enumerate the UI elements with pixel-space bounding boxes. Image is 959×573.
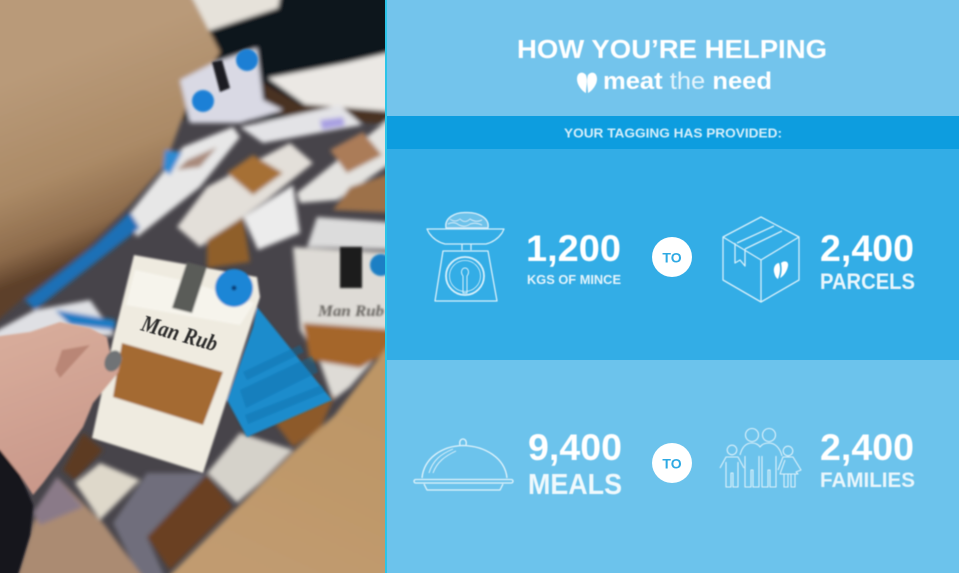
logo: meat the need: meat the need (603, 68, 772, 95)
second pouch label: Man Rub: Man Rub (317, 303, 384, 320)
stat: 2,400 parcels (820, 228, 915, 294)
panel: bottom statistics background (387, 360, 959, 573)
stat: 2,400 families: FAMILIES (820, 469, 915, 492)
badge: to (652, 443, 692, 483)
bottom left box (18, 482, 143, 573)
stat: 9,400 meals: MEALS (528, 469, 622, 501)
icon: scales with mince (427, 212, 504, 301)
right pouch (293, 247, 400, 400)
badge: to (652, 237, 692, 277)
stat: 1,200 kgs of mince (526, 228, 621, 287)
stat: 1,200 kgs of mince: 1,200 (526, 228, 621, 269)
pouch label: Man Rub: Man Rub (138, 311, 220, 356)
main pouch (92, 255, 260, 473)
stat: 9,400 meals (528, 427, 622, 501)
stat: 1,200 kgs of mince: KGS OF MINCE (527, 272, 621, 287)
panel: header background (387, 0, 959, 116)
divider strip (385, 0, 387, 573)
panel: photo of spice pouches in a cardboard box (0, 0, 420, 573)
badge: to: TO (662, 250, 682, 266)
band heading: YOUR TAGGING HAS PROVIDED: (564, 126, 782, 140)
sleeve (0, 445, 33, 573)
panel: tagging band (387, 116, 959, 149)
stat: 2,400 families (820, 427, 915, 492)
small pouch buttons (236, 49, 258, 71)
icon: serving cloche (414, 439, 513, 490)
badge: to: TO (662, 456, 682, 472)
panel: top statistics background (387, 149, 959, 360)
title: HOW YOU’RE HELPING (517, 36, 827, 64)
stat: 2,400 parcels: PARCELS (820, 269, 915, 294)
stat: 2,400 parcels: 2,400 (820, 228, 914, 269)
background pouches (180, 48, 283, 123)
lower pouches (63, 433, 103, 480)
icon: family (720, 428, 801, 487)
hand (0, 322, 122, 495)
stat: 9,400 meals: 9,400 (528, 427, 622, 468)
bottom right box flap (168, 345, 385, 573)
box flap (0, 0, 220, 345)
icon: parcel box (723, 217, 799, 302)
stat: 2,400 families: 2,400 (820, 427, 914, 468)
blue tag (227, 307, 332, 437)
